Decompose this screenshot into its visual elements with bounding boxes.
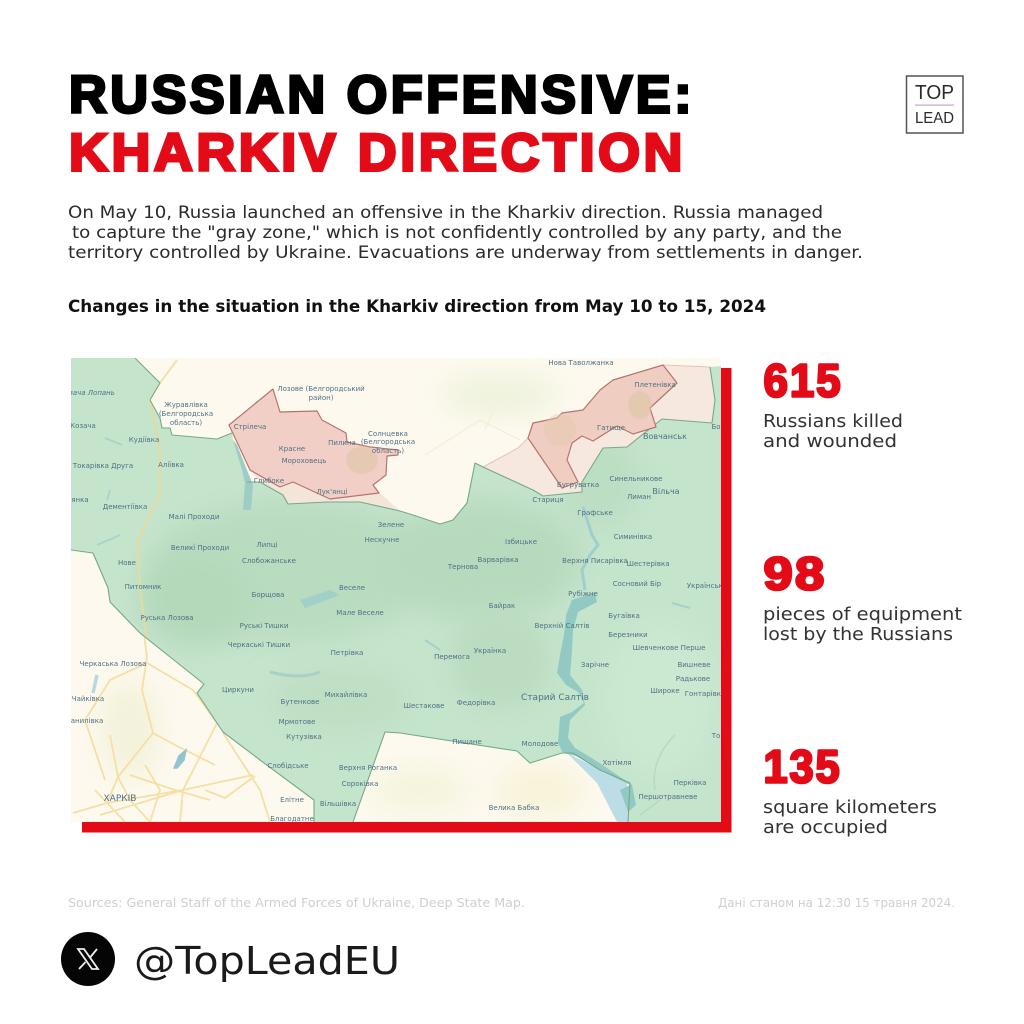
settlement labels: Тернова [447,563,478,571]
settlement labels: область) [170,419,202,427]
settlement labels: Байрак [489,602,515,610]
settlement labels: Питомник [125,583,161,591]
settlement labels: Зарічне [581,661,609,669]
settlement labels: Березники [608,631,648,639]
sources note: Sources: General Staff of the Armed Forces of Ukraine, Deep State Map. [68,896,525,910]
settlement labels: Радькове [676,675,710,683]
settlement labels: Широке [650,687,680,695]
settlement labels: Чайківка [72,695,104,703]
settlement labels: Першотравневе [639,793,697,801]
data date note: Дані станом на 12:30 15 травня 2024. [718,896,955,910]
settlement labels: Сороківка [342,780,378,788]
settlement labels [69,359,727,823]
settlement labels: Синельникове [610,475,662,483]
settlement labels: Слобожанське [242,557,296,565]
settlement labels: Симинівка [614,533,652,541]
settlement labels: Аліївка [158,461,184,469]
stat: Russians killed and wounded [763,354,903,452]
settlement labels: Руська Лозова [140,614,194,622]
settlement labels: Верхня Писарівка [562,557,628,565]
title: RUSSIAN OFFENSIVE: [69,66,695,124]
settlement labels: ХАРКІВ [104,794,136,804]
settlement labels: Нескучне [365,536,399,544]
settlement labels: Черкаська Лозова [80,660,146,668]
settlement labels: Гонтарівка [685,690,725,698]
settlement labels: Верхній Салтів [535,622,589,630]
settlement labels: Малі Проходи [169,513,219,521]
occupied zone: east [528,365,677,488]
settlement labels: Лук'янці [316,488,348,496]
settlement labels: Федорівка [457,699,495,707]
intro text [68,203,863,263]
settlement labels: Бутенкове [281,698,319,706]
settlement labels: Стрілеча [234,423,266,431]
settlement labels: Шестерівка [626,560,670,568]
settlement labels: Молодове [522,740,558,748]
settlement labels: Липці [256,541,278,549]
settlement labels: Нове [118,559,136,567]
settlement labels: Варварівка [478,556,518,564]
settlement labels: Перемога [434,653,470,661]
settlement labels: Плетенівка [634,381,676,389]
settlement labels: Лозове (Белгородський [277,385,365,393]
settlement labels: Михайлівка [325,691,367,699]
settlement labels: Бугруватка [557,481,599,489]
icon: X logo [61,932,115,986]
settlement labels: Графське [577,509,613,517]
settlement labels: зача Лопань [69,389,115,397]
settlement labels: Козача [70,422,96,430]
settlement labels: Гатище [597,424,625,432]
settlement labels: район) [309,394,334,402]
settlement labels: Мороховець [282,457,326,465]
logo: Top Lead: TOP [915,82,954,104]
settlement labels: Стариця [532,496,564,504]
settlement labels: Елітне [280,796,304,804]
settlement labels: Ізбицьке [505,538,537,546]
settlement labels: Солнцевка [368,430,408,438]
border outline [71,358,715,822]
stat: equipment lost: 98 [764,548,826,600]
settlement labels: Пилина [328,439,356,447]
roads: Kharkiv area [72,636,271,822]
settlement labels: Великі Проходи [171,544,229,552]
gray zone [250,365,715,511]
settlement labels: Шевченкове Перше [633,644,705,652]
settlement labels: область) [372,447,404,455]
stat: square kilometers occupied: are occupied [763,817,888,838]
settlement labels: Хотімля [602,759,632,767]
stat: equipment lost [763,548,962,645]
settlement labels: Петрівка [331,649,363,657]
settlement labels: Руські Тишки [240,622,288,630]
stat: square kilometers occupied [763,740,937,838]
settlement labels: Веселе [339,584,365,592]
settlement labels: Вільча [652,487,680,496]
settlement labels: Черкаські Тишки [228,641,290,649]
settlement labels: То [711,732,720,740]
stat: square kilometers occupied: square kilometers [763,797,937,818]
map frame: red offset bars [82,368,732,832]
intro text: territory controlled by Ukraine. Evacuations are underway from settlements in danger. [68,243,863,263]
settlement labels: Старий Салтів [521,693,589,703]
settlement labels: Велика Бабка [489,804,539,812]
settlement labels: Зелене [378,521,404,529]
title: KHARKIV DIRECTION [69,124,686,182]
settlement labels: Рубіжне [568,590,598,598]
settlement labels: Лиман [627,493,651,501]
settlement labels: анилівка [71,717,103,725]
settlement labels: Вишневе [677,661,711,669]
title [69,66,695,182]
settlement labels: Вовчанськ [643,432,687,441]
territory controlled by Ukraine [71,358,721,822]
settlement labels: Мрмотове [279,718,315,726]
settlement labels: Кудіївка [129,436,159,444]
settlement labels: Верхня Роганка [339,764,397,772]
settlement labels: (Белгородська [159,410,213,418]
stat: equipment lost: lost by the Russians [763,624,953,645]
settlement labels: Дементіївка [103,503,147,511]
social handle: @TopLeadEU [134,939,400,983]
map subtitle: Changes in the situation in the Kharkiv direction from May 10 to 15, 2024 [68,297,766,317]
settlement labels: янка [71,496,89,504]
logo: Top Lead [906,76,963,133]
settlement labels: (Белгородська [361,438,415,446]
map [69,358,727,823]
settlement labels: Перківка [674,779,706,787]
stat: Russians killed and wounded: Russians killed [763,411,903,432]
settlement labels: Українка [474,647,506,655]
intro text: to capture the "gray zone," which is not confidently controlled by any party, and the [72,223,842,243]
settlement labels: Кутузівка [286,733,322,741]
stat: Russians killed and wounded: and wounded [763,431,897,452]
intro text: On May 10, Russia launched an offensive in the Kharkiv direction. Russia managed [68,203,823,223]
settlement labels: Бугаївка [608,612,640,620]
settlement labels: Журавлівка [164,401,208,409]
settlement labels: Глибоке [254,477,284,485]
water: Siverskyi Donets and Pechenihy reservoir [97,438,690,822]
settlement labels: Сосновий Бір [613,580,662,588]
settlement labels: Нова Таволжанка [548,359,614,367]
stat: Russians killed and wounded: 615 [764,354,842,406]
settlement labels: Бо [711,423,721,431]
settlement labels: Циркуни [222,686,254,694]
settlement labels: Українське [687,582,727,590]
settlement labels: Красне [279,445,305,453]
Russian-side water [174,750,186,768]
settlement labels: Мале Веселе [336,609,384,617]
settlement labels: Борщова [252,591,284,599]
settlement labels: Шестакове [404,702,444,710]
settlement labels: Слобідське [267,762,309,770]
settlement labels: Благодатне [270,815,314,823]
settlement labels: Токарівка Друга [72,462,133,470]
stat: equipment lost: pieces of equipment [763,604,962,625]
settlement labels: Вільшівка [320,800,356,808]
logo: Top Lead: LEAD [915,110,954,127]
stat: square kilometers occupied: 135 [764,740,842,792]
occupied zone: west [229,389,398,499]
settlement labels: Пищане [452,738,482,746]
